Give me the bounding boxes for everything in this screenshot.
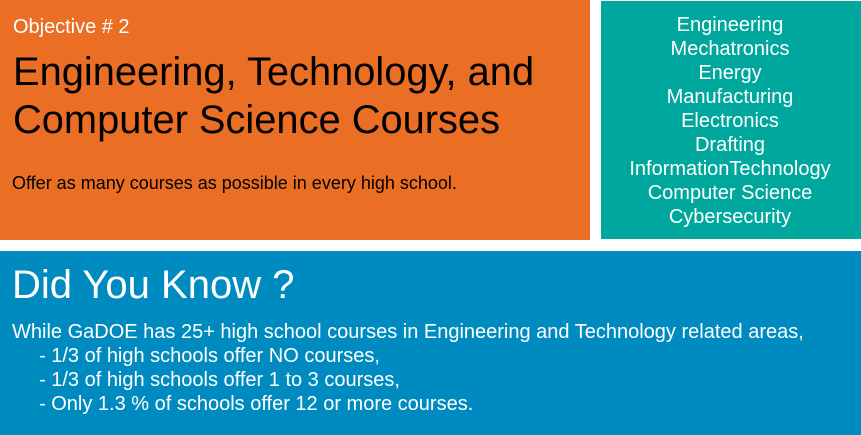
course area list: InformationTechnology	[629, 158, 831, 180]
course area list: Mechatronics	[671, 38, 789, 60]
heading	[13, 50, 534, 142]
heading: Computer Science Courses	[13, 98, 500, 142]
course area list: Manufacturing	[667, 86, 793, 108]
course area list: Drafting	[695, 134, 765, 156]
course area list: Engineering	[677, 14, 783, 36]
statistics list: - Only 1.3 % of schools offer 12 or more courses.	[39, 393, 473, 415]
statistics list: - 1/3 of high schools offer NO courses,	[39, 345, 380, 367]
course area list: Energy	[698, 62, 762, 84]
panel: did you know	[0, 251, 861, 435]
did you know intro: While GaDOE has 25+ high school courses in Engineering and Technology related areas,	[12, 321, 804, 343]
statistics list: - 1/3 of high schools offer 1 to 3 courses,	[39, 369, 400, 391]
course area list: Computer Science	[648, 182, 812, 204]
did you know heading: Did You Know ?	[12, 263, 294, 307]
heading: Engineering, Technology, and	[13, 50, 534, 94]
objective description: Offer as many courses as possible in every high school.	[12, 173, 457, 193]
course area list	[629, 14, 831, 228]
panel: course areas	[601, 1, 861, 239]
statistics list	[39, 345, 473, 415]
course area list: Cybersecurity	[669, 206, 791, 228]
course area list: Electronics	[681, 110, 779, 132]
objective label: Objective # 2	[13, 16, 129, 38]
panel: objective	[0, 0, 590, 240]
